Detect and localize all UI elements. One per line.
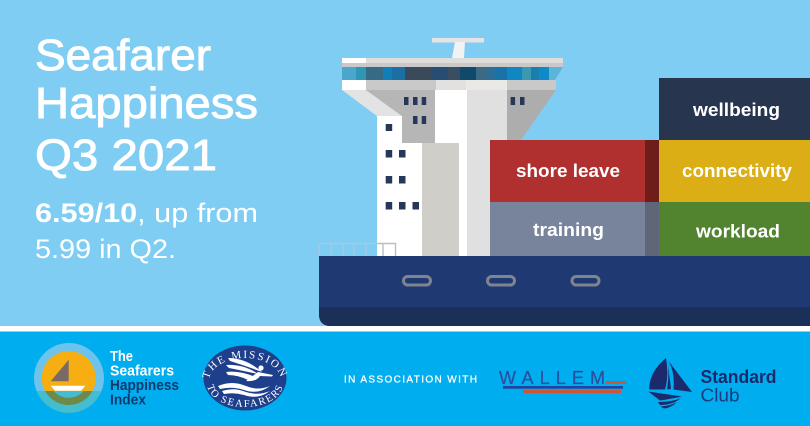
tower windows	[386, 97, 524, 210]
title: Seafarer Happiness Q3 2021	[35, 31, 258, 180]
bridge windows strip	[342, 67, 563, 80]
bridge roof	[342, 58, 563, 67]
logo: Wallem: WALLEM	[499, 368, 605, 388]
text block: score summary: 5.99 in Q2.	[35, 234, 176, 264]
text block: score summary: 6.59/10 , up from	[35, 198, 258, 228]
container: training: training	[533, 220, 604, 240]
logo: Standard Club	[648, 358, 776, 408]
logo: Wallem	[499, 368, 626, 393]
icon: sun and boat	[34, 343, 104, 413]
logo: Standard Club: Club	[700, 386, 740, 406]
ship hull	[319, 256, 810, 326]
logo: Seafarers Happiness Index	[34, 343, 179, 413]
icon: radar mast	[432, 38, 484, 58]
container: training	[490, 202, 659, 256]
logo: The Mission to Seafarers: TO SEAFARERS	[208, 384, 282, 407]
white waterline band	[0, 326, 810, 332]
footer band	[0, 332, 810, 426]
logo wordmark: The	[110, 348, 133, 365]
text block: score summary	[35, 198, 258, 264]
icon: flying angel and waves	[218, 358, 273, 397]
logo wordmark	[110, 348, 179, 409]
container: connectivity: connectivity	[682, 161, 792, 181]
ship superstructure	[319, 38, 563, 256]
logo wordmark: Seafarers	[110, 363, 174, 380]
logo wordmark: Happiness	[110, 377, 179, 394]
container: wellbeing	[659, 78, 810, 140]
hull portholes	[404, 276, 599, 285]
container: shore leave	[490, 140, 659, 202]
logo wordmark: Index	[110, 392, 147, 409]
logo: The Mission to Seafarers: THE MISSION	[202, 350, 288, 378]
association label: IN ASSOCIATION WITH	[344, 374, 477, 386]
title: Seafarer Happiness Q3 2021: Q3 2021	[35, 131, 217, 180]
container: workload	[659, 202, 810, 256]
title: Seafarer Happiness Q3 2021: Seafarer	[35, 31, 211, 80]
container: workload: workload	[695, 222, 780, 242]
title: Seafarer Happiness Q3 2021: Happiness	[35, 79, 258, 128]
container: connectivity	[659, 140, 810, 202]
deck railing	[319, 244, 396, 256]
icon: sailing ship	[648, 358, 692, 408]
logo: Standard Club: Standard	[700, 367, 776, 387]
container: shore leave: shore leave	[516, 161, 620, 181]
logo: The Mission to Seafarers	[202, 346, 288, 410]
bridge underside and tower	[342, 80, 556, 256]
container: wellbeing: wellbeing	[692, 100, 780, 120]
